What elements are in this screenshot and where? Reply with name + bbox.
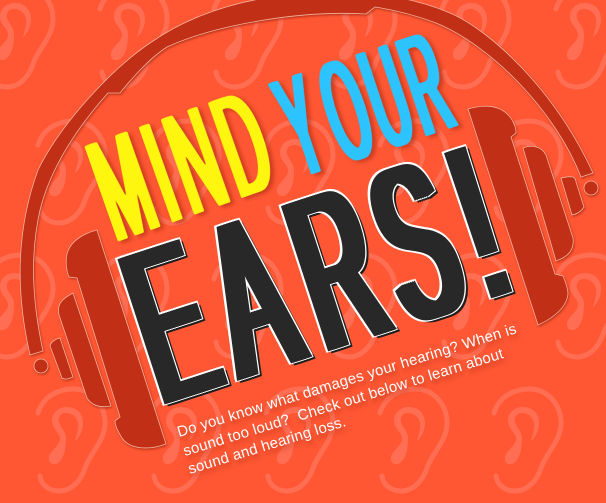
line 3: sound and hearing loss. <box>186 413 348 478</box>
left ear cup small <box>50 338 73 379</box>
line 2: sound too loud? Check out below to learn about <box>181 345 506 460</box>
right ear cup middle <box>523 146 573 261</box>
line 1: Do you know what damages your hearing? When is <box>175 320 519 441</box>
right hinge circle <box>584 181 598 195</box>
heading: EARS!: EARS! <box>101 100 530 450</box>
left hinge circle <box>34 359 48 373</box>
headband <box>20 0 593 355</box>
intro paragraph <box>175 320 519 478</box>
heading: MIND: MIND <box>72 60 290 272</box>
right ear cup small <box>561 177 584 215</box>
left ear cup middle <box>58 293 111 407</box>
heading: YOUR: YOUR <box>259 1 468 207</box>
right ear cup large <box>468 106 568 325</box>
left ear cup large <box>66 230 166 448</box>
